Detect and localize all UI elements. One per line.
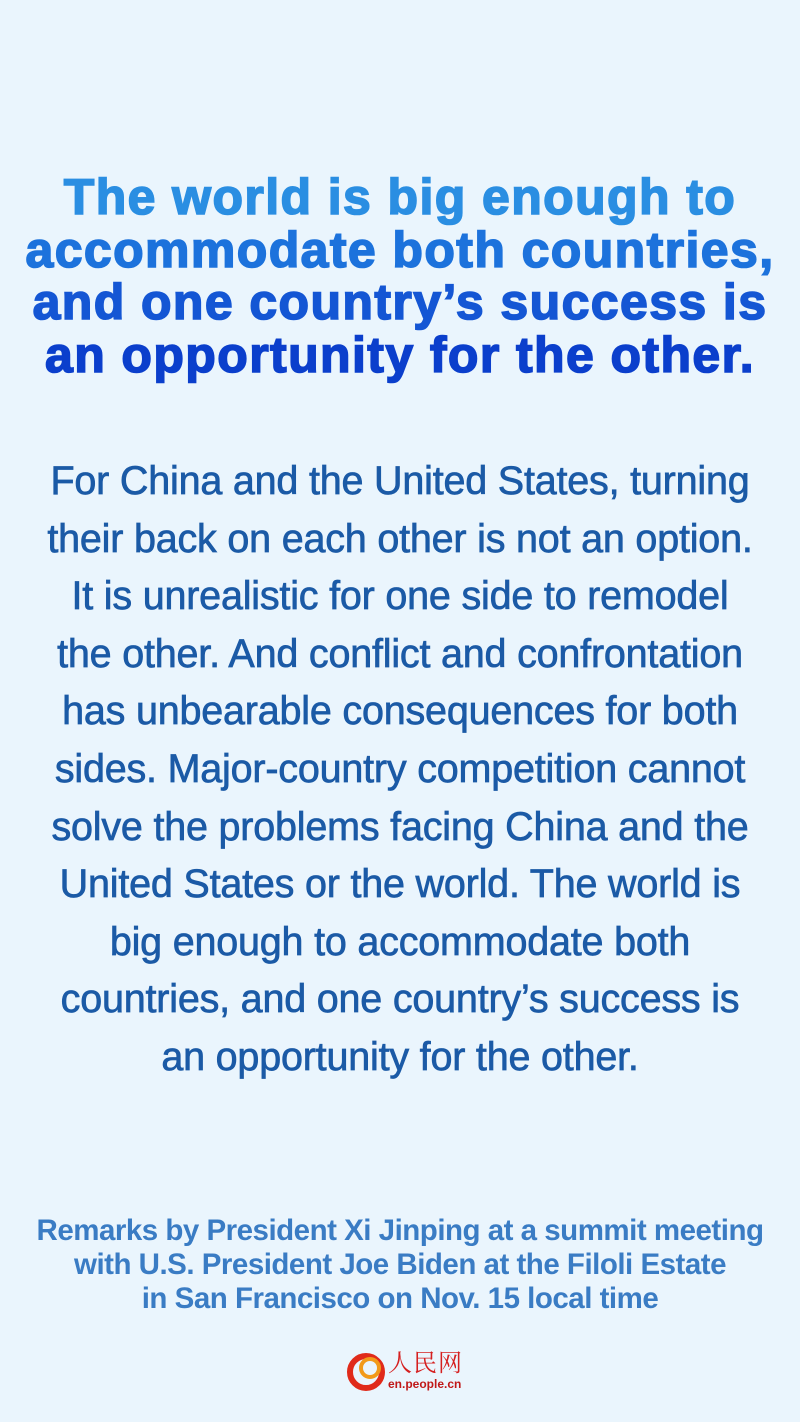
footer source: Remarks by President Xi Jinping at a summit meeting (37, 1214, 763, 1247)
body text: big enough to accommodate both (110, 920, 690, 964)
title: an opportunity for the other. (45, 326, 755, 382)
footer source: with U.S. President Joe Biden at the Filoli Estate (74, 1248, 726, 1281)
body text: It is unrealistic for one side to remodel (71, 574, 729, 618)
body text: solve the problems facing China and the (51, 805, 749, 849)
body text: sides. Major-country competition cannot (55, 747, 745, 791)
body text: their back on each other is not an option. (47, 517, 753, 561)
title: accommodate both countries, (25, 222, 775, 278)
logo: en.people.cn (388, 1377, 461, 1391)
body text (47, 459, 753, 1079)
title: The world is big enough to (64, 169, 736, 225)
logo (347, 1343, 463, 1391)
logo: 人民网 (388, 1343, 463, 1378)
body text: For China and the United States, turning (50, 459, 750, 503)
body text: an opportunity for the other. (161, 1035, 639, 1079)
title (25, 169, 775, 384)
body text: the other. And conflict and confrontation (57, 632, 743, 676)
footer source (37, 1214, 763, 1315)
body text: has unbearable consequences for both (62, 689, 738, 733)
body text: countries, and one country’s success is (61, 977, 739, 1021)
footer source: in San Francisco on Nov. 15 local time (142, 1282, 658, 1315)
title: and one country’s success is (33, 274, 767, 330)
body text: United States or the world. The world is (60, 862, 740, 906)
